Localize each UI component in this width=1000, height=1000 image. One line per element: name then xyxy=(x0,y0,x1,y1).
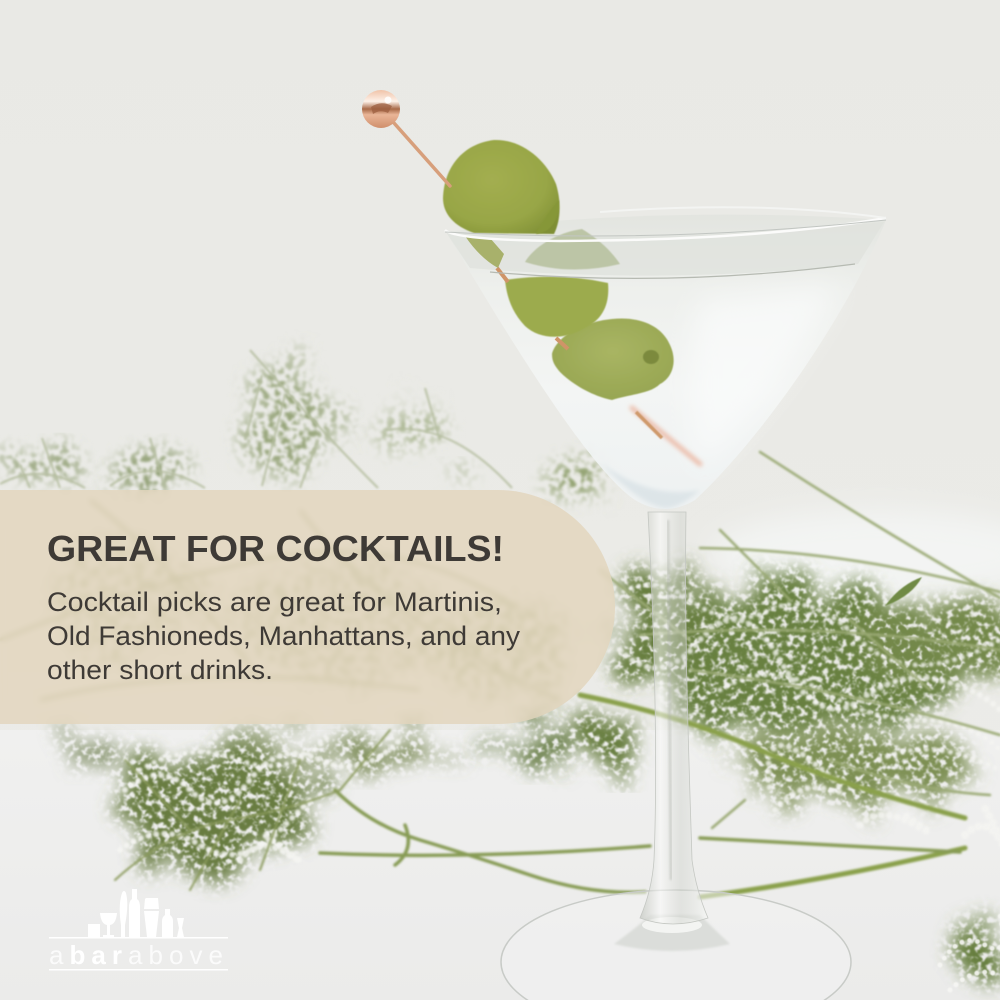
body text: Old Fashioneds, Manhattans, and any xyxy=(47,621,521,651)
body text: other short drinks. xyxy=(47,655,273,685)
wordmark: abarabove xyxy=(49,940,223,970)
glass foot xyxy=(501,890,851,1000)
glass rim xyxy=(445,218,886,241)
glass stem xyxy=(640,512,708,924)
bright liquid highlight xyxy=(690,285,840,470)
foreground flowers, bottom right xyxy=(940,915,1000,990)
table surface xyxy=(0,730,1000,1000)
bowl base tint xyxy=(600,462,700,508)
light area on right side of wall xyxy=(710,510,1000,600)
heading: GREAT FOR COCKTAILS! xyxy=(47,528,504,569)
icon: bar glassware silhouettes xyxy=(88,889,184,937)
logo: a bar above xyxy=(49,889,228,970)
olive: submerged middle xyxy=(505,277,608,337)
olive: seen through rim xyxy=(525,229,620,270)
submerged lower pick xyxy=(632,408,700,464)
leaf xyxy=(885,577,922,606)
liquid surface band xyxy=(446,222,884,276)
olive: submerged bottom xyxy=(552,318,674,400)
white blossoms, lower left xyxy=(120,735,400,862)
far blurred sprays behind the glass xyxy=(0,350,604,497)
green stems xyxy=(115,452,1000,897)
olive crease xyxy=(536,200,559,234)
body text xyxy=(47,587,521,685)
olive pimento hole xyxy=(643,350,659,364)
olive top seen below rim xyxy=(465,236,504,268)
main foliage mass, right xyxy=(560,570,1000,848)
faint foliage seen through the panel xyxy=(0,500,570,700)
white blossoms, right xyxy=(610,585,1000,848)
body text: Cocktail picks are great for Martinis, xyxy=(47,587,502,617)
panel: translucent beige callout xyxy=(0,490,615,724)
martini glass xyxy=(362,90,886,1000)
glass bowl xyxy=(446,215,886,509)
olive: top, above the rim xyxy=(443,140,560,234)
foliage mass, lower left xyxy=(56,727,569,870)
cocktail pick ball xyxy=(362,90,400,128)
pick segments between olives xyxy=(497,268,568,349)
top rule xyxy=(49,937,228,938)
bottom rule xyxy=(49,969,228,970)
cocktail pick stick xyxy=(394,123,450,186)
